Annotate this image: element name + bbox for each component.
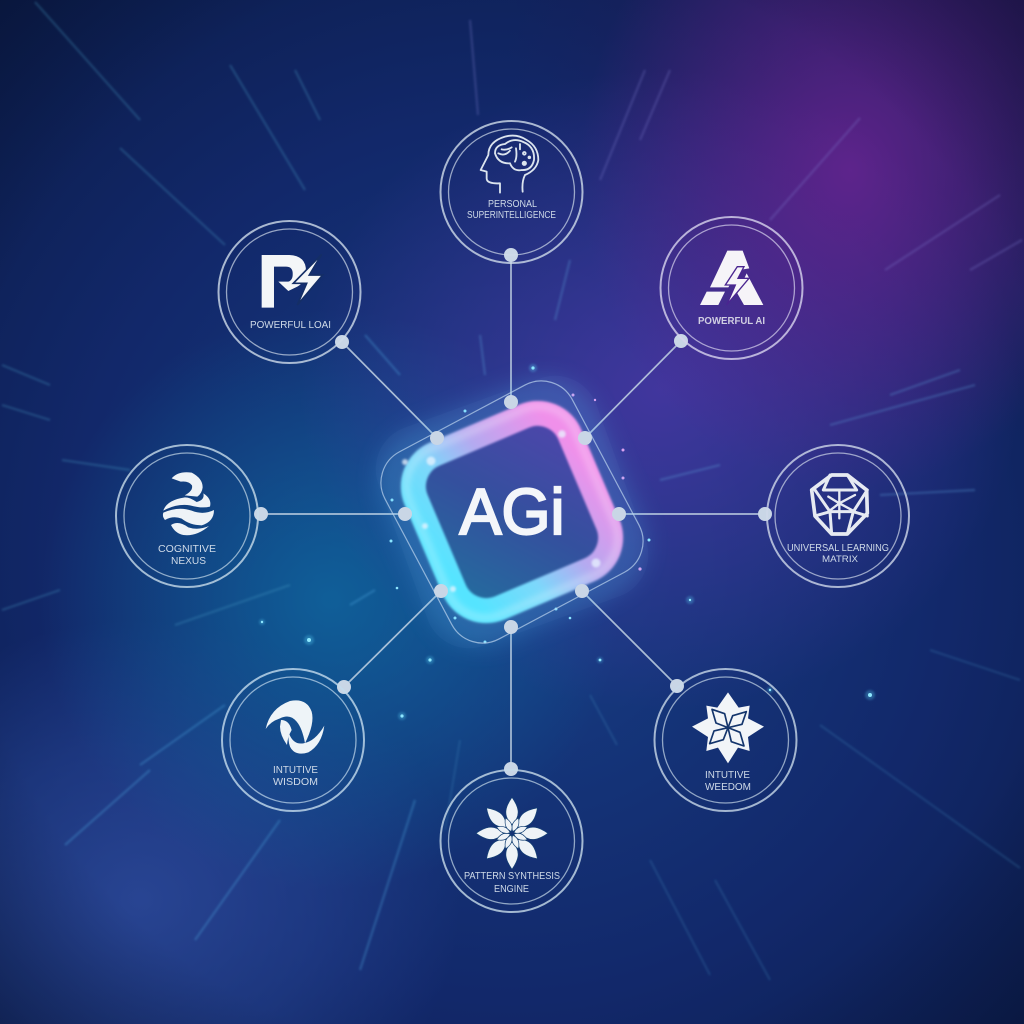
panel: cognitive nexus: [116, 445, 258, 587]
icon: head with brain: [481, 136, 538, 193]
label: PERSONAL: [488, 199, 537, 210]
central AGI frame: [363, 363, 661, 661]
label: INTUTIVE: [705, 769, 750, 781]
icon: eight-point flower: [692, 692, 764, 763]
icon: A with lightning bolt: [700, 251, 763, 305]
panel: intutive weedom: [654, 669, 796, 811]
label: NEXUS: [171, 556, 206, 567]
frame ring: [403, 403, 621, 621]
label: INTUTIVE: [273, 764, 318, 776]
label: [787, 542, 889, 565]
ring pair: [116, 445, 258, 587]
AGI label: AGi: [460, 475, 564, 548]
panel: personal superintelligence: [440, 121, 582, 263]
frame glow: [381, 381, 643, 643]
ring pair: [222, 669, 364, 811]
thin outline: [369, 369, 655, 655]
panel: universal learning matrix: [767, 445, 909, 587]
ring pair: [660, 217, 802, 359]
label: ENGINE: [494, 883, 529, 895]
connector lines: [261, 255, 765, 769]
translucent back panel: [363, 363, 661, 661]
panel: powerful ai: [660, 217, 802, 359]
frame highlight: [394, 394, 630, 630]
label: MATRIX: [822, 554, 859, 565]
connector nodes: [254, 248, 772, 776]
label: SUPERINTELLIGENCE: [467, 210, 556, 221]
label: [273, 764, 318, 788]
ring pair: [767, 445, 909, 587]
icon: coiled snake: [163, 472, 214, 535]
particles: [259, 364, 875, 720]
frame inner fill: [415, 415, 609, 609]
label: COGNITIVE: [158, 544, 216, 555]
ring pair: [440, 121, 582, 263]
panel: powerful loai: [218, 221, 360, 363]
label: POWERFUL LOAI: [250, 319, 331, 331]
label: WEEDOM: [705, 781, 751, 793]
label: WISDOM: [273, 776, 318, 788]
label: [705, 769, 751, 793]
label: PATTERN SYNTHESIS: [464, 870, 560, 882]
label: UNIVERSAL LEARNING: [787, 542, 889, 554]
icon: P with lightning bolt: [262, 254, 323, 308]
ring pair: [218, 221, 360, 363]
ring pair: [440, 770, 582, 912]
label: [464, 870, 560, 895]
label: [158, 544, 216, 567]
panel: pattern synthesis engine: [440, 770, 582, 912]
icon: leaf snowflake: [476, 797, 548, 869]
panel: intutive wisdom: [222, 669, 364, 811]
frame sparkles: [402, 430, 600, 592]
label: [467, 199, 556, 221]
ring pair: [654, 669, 796, 811]
label: POWERFUL AI: [698, 315, 765, 327]
icon: crystalline network: [812, 475, 867, 534]
icon: swirl: [266, 700, 324, 754]
